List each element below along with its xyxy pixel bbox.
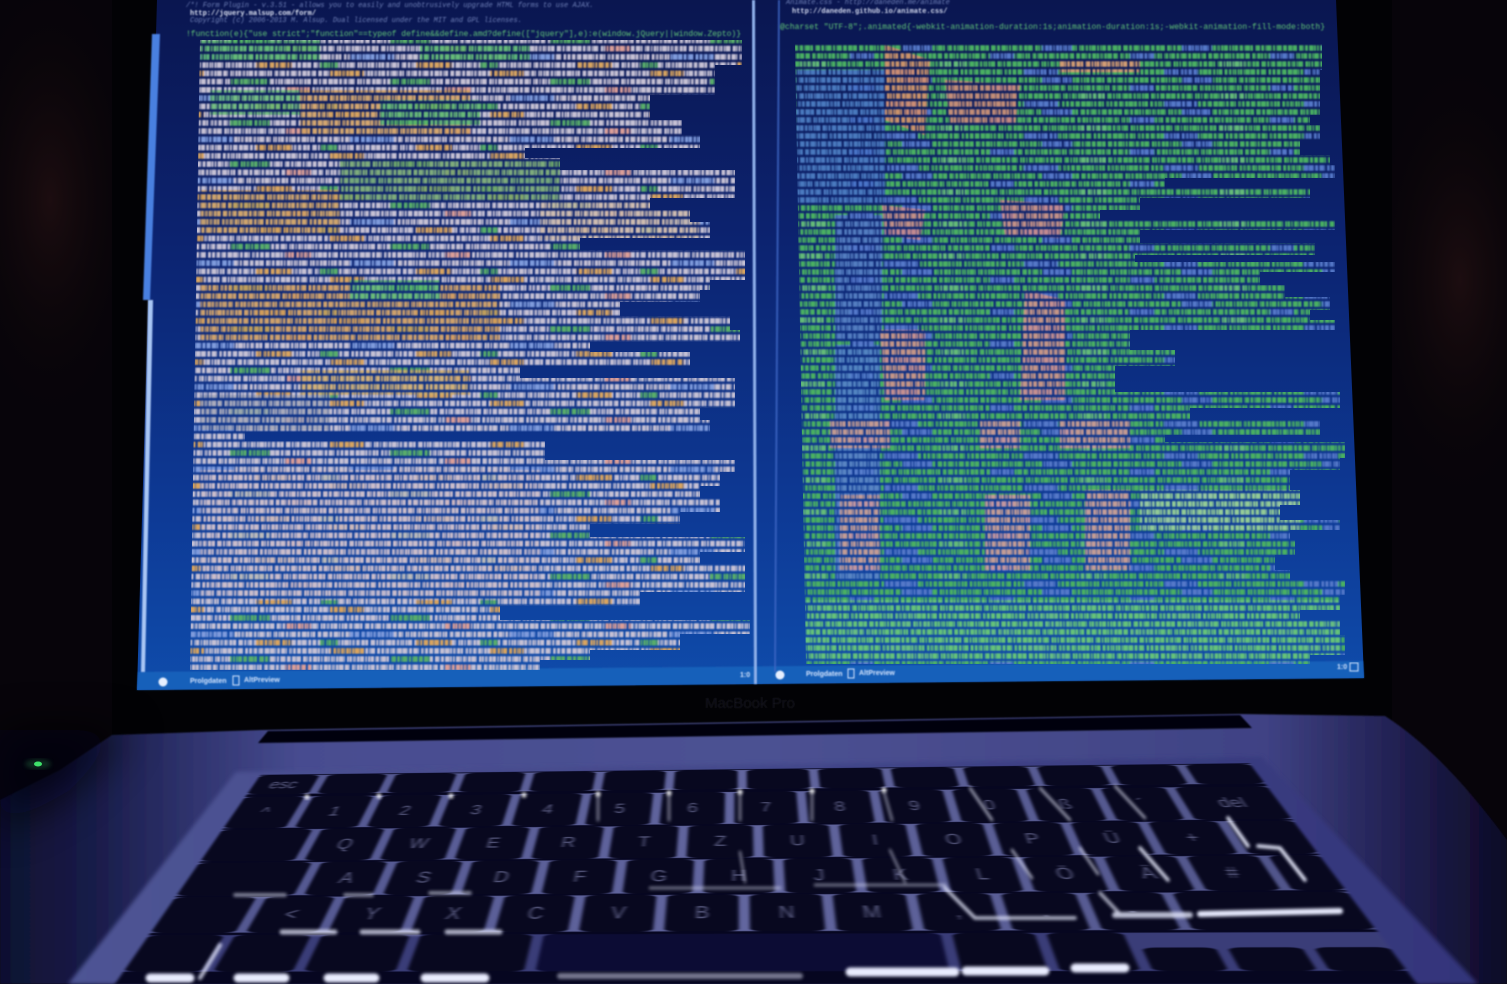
left pane code block (180, 30, 760, 680)
keyboard keys: S (414, 868, 434, 886)
keyboard keys: Ä (1136, 864, 1160, 882)
keyboard keys: X (443, 904, 464, 923)
keyboard keys: L (973, 865, 991, 883)
right status bar labels: Prolgdaten (806, 671, 843, 678)
right pane header comment: http://daneden.github.io/animate.css/ (792, 8, 947, 16)
keyboard keys: T (637, 833, 651, 850)
keyboard keys: U (789, 832, 805, 848)
right status bar labels: AltPreview (859, 670, 895, 677)
right pane first code line: @charset "UTF-8";.animated{-webkit-animation-duration:1s;animation-duration:1s;-webkit-animation-fill-mode:both} (780, 23, 1325, 32)
right pane colour patches (796, 45, 1340, 662)
keyboard keys: H (731, 866, 746, 884)
keyboard keys: 6 (687, 800, 698, 815)
keyboard keys: ^ (256, 804, 274, 819)
left pane first code line: !function(e){"use strict";"function"==typeof define&&define.amd?define(["jquery"],e):e(window.jQuery||window.Zepto)} (186, 30, 741, 39)
keyboard keys: A (336, 869, 358, 886)
keyboard keys: 1 (326, 804, 344, 818)
left status bar labels: AltPreview (244, 677, 280, 684)
backlight glints between function and number rows (304, 788, 886, 800)
right status bar labels (776, 663, 1358, 680)
keyboard keys: B (694, 903, 710, 922)
keyboard keys: , (952, 901, 963, 921)
display bezel (112, 0, 1392, 735)
hinge shadow band (258, 715, 1252, 743)
keyboard keys: O (943, 831, 964, 847)
right pane gutter line (774, 0, 780, 672)
brand engraving under the screen: MacBook Pro (705, 695, 795, 712)
keyboard well bevel (68, 757, 1478, 984)
left pane header comment (186, 2, 593, 25)
keyboard keys: C (525, 903, 546, 923)
power indicator light (25, 759, 51, 769)
left status bar labels (158, 672, 750, 686)
keyboard keys: M (861, 902, 883, 921)
keyboard keys: - (1124, 901, 1141, 921)
keyboard keys: F (572, 867, 588, 885)
keyboard keys: 8 (833, 799, 846, 814)
shadow fading the top-left deck corner (0, 730, 130, 830)
left status bar labels: Prolgdaten (190, 678, 227, 685)
keyboard keys: W (406, 835, 431, 851)
warm glow in the room, right side (1370, 60, 1507, 500)
keyboard keys: . (1038, 901, 1051, 921)
keyboard keys: ´ (1134, 796, 1149, 811)
warm glow in the room, left side (0, 0, 140, 420)
keyboard keys: 7 (760, 799, 772, 814)
keyboard keys: < (280, 904, 303, 923)
left pane header comment: Copyright (c) 2006-2013 M. Alsup. Dual licensed under the MIT and GPL licenses. (190, 17, 522, 25)
keyboard keys: Y (361, 904, 383, 923)
keyboard keys: esc (266, 777, 302, 791)
keyboard keys: + (1181, 829, 1203, 846)
left scroll indicator (143, 34, 160, 300)
keyboard keys: P (1022, 830, 1042, 847)
keyboard keys: Ö (1053, 864, 1077, 883)
keyboard keys: Ü (1100, 830, 1124, 846)
left pane header comment: /*! Form Plugin - v.3.51 - allows you to easily and unobtrusively upgrade HTML forms to use AJAX. (186, 2, 593, 10)
keyboard keys: N (778, 902, 795, 922)
right pane code block (790, 40, 1360, 670)
keyboard keys (113, 763, 1419, 984)
keyboard keys: 2 (397, 803, 414, 818)
keyboard keys: R (559, 834, 577, 850)
left pane header comment: http://jquery.malsup.com/form/ (190, 10, 316, 18)
keyboard keys: Z (714, 833, 727, 849)
keyboard keys: K (891, 865, 909, 883)
keyboard keys: 9 (907, 798, 922, 813)
keyboard keys: ß (1056, 796, 1075, 812)
keyboard keys: 5 (613, 801, 626, 816)
keyboard keys: 3 (468, 802, 484, 817)
keyboard keys: I (871, 831, 879, 848)
left pane colour patches (200, 40, 700, 600)
keyboard keys: del (1213, 795, 1251, 810)
left status bar labels: 1:0 (740, 672, 750, 679)
screen panel (137, 0, 1364, 690)
split pane divider (752, 0, 757, 684)
keyboard keys: # (1220, 863, 1244, 882)
right pane header comment (785, 0, 950, 16)
keyboard keys: Q (333, 836, 357, 852)
laptop deck (0, 714, 1507, 984)
keyboard keys: 4 (541, 802, 555, 816)
editor status bar (137, 661, 1364, 690)
keyboard keys: G (650, 867, 668, 885)
keyboard keys: V (610, 903, 627, 922)
keyboard keys: E (484, 835, 502, 851)
right status bar labels: 1:0 (1337, 664, 1347, 671)
keyboard keys: D (491, 868, 511, 886)
keyboard keys: J (813, 866, 825, 884)
keyboard keys: 0 (981, 797, 997, 812)
